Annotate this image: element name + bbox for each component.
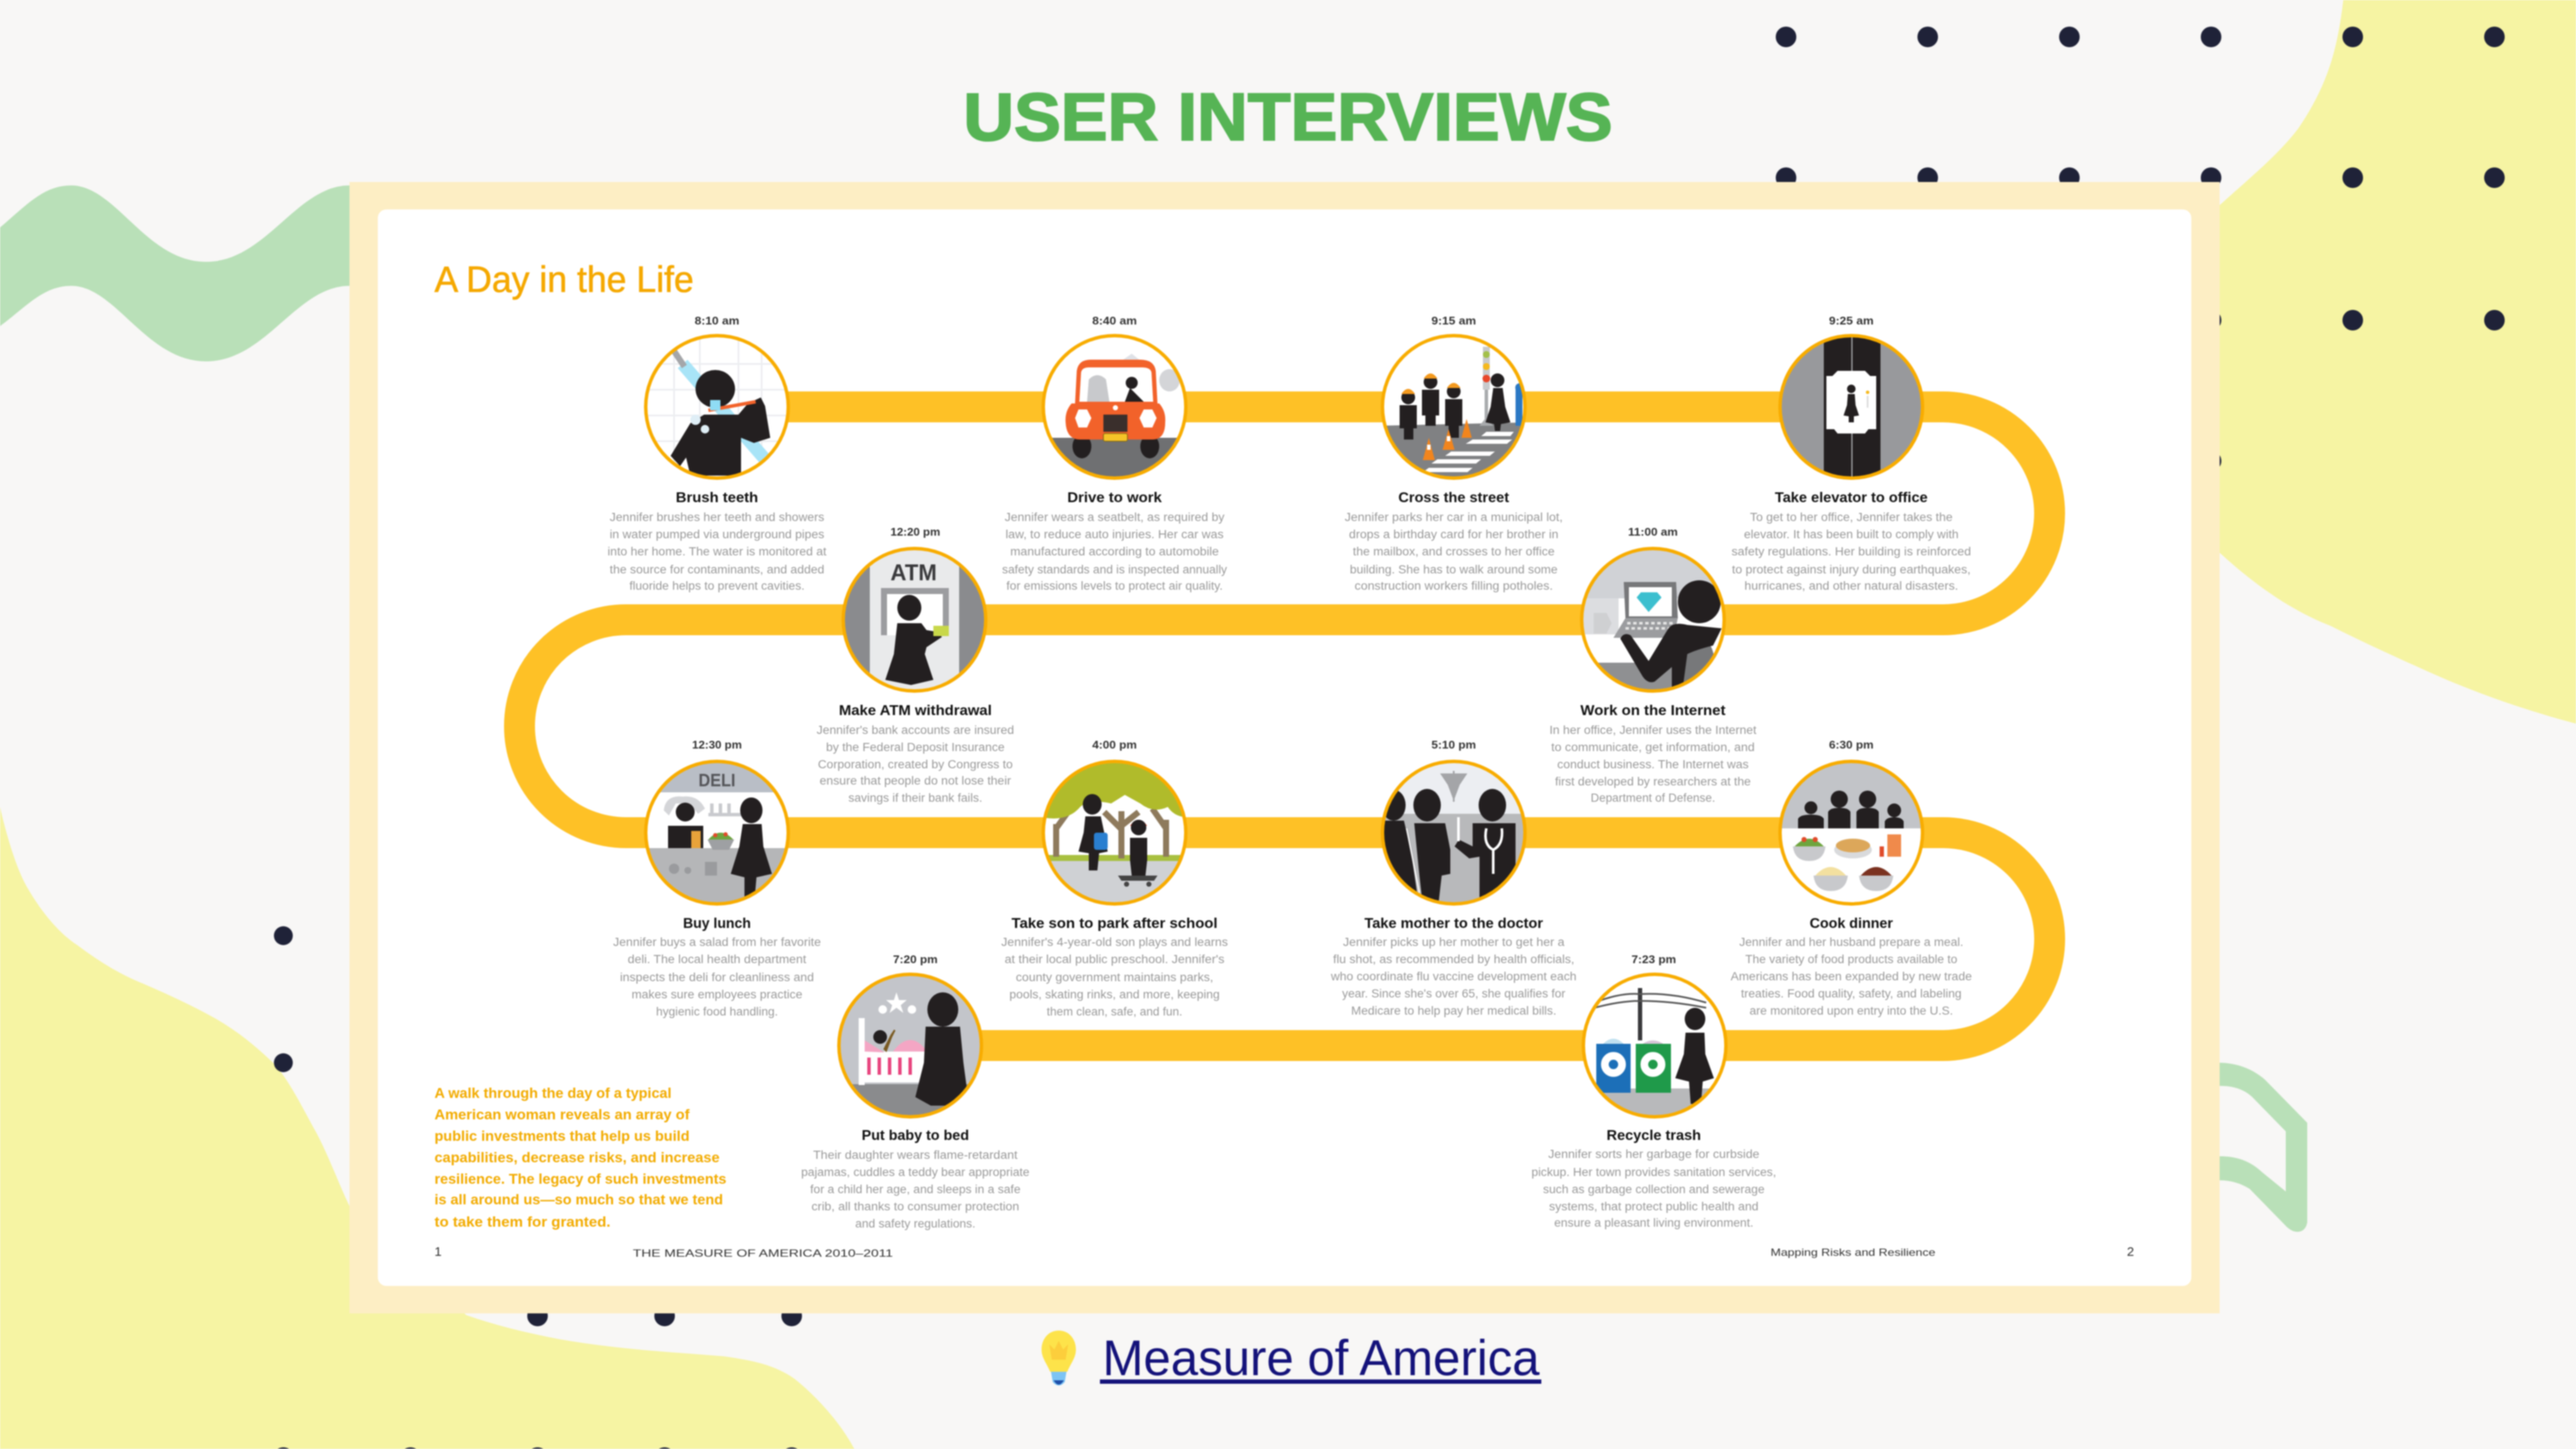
step description: who coordinate flu vaccine development each [1330,970,1577,983]
step description: are monitored upon entry into the U.S. [1750,1004,1953,1017]
icon: car [1042,336,1188,481]
time: 12:30 pm [692,738,742,751]
step description: hurricanes, and other natural disasters. [1745,579,1958,592]
step description: to protect against injury during earthquakes, [1732,563,1971,576]
step description: drops a birthday card for her brother in [1349,528,1558,541]
step description: Their daughter wears flame-retardant [813,1149,1018,1161]
step: Make ATM withdrawal [817,525,1014,804]
step description: such as garbage collection and sewerage [1543,1183,1765,1196]
step description: pickup. Her town provides sanitation services, [1532,1166,1776,1179]
step: Cross the street [1345,314,1563,592]
time: 9:15 am [1431,314,1476,327]
time: 8:40 am [1092,314,1137,327]
panel: white page [378,209,2191,1286]
step description: Jennifer brushes her teeth and showers [610,511,824,524]
step description: construction workers filling potholes. [1355,579,1552,592]
step description [817,724,1014,804]
time: 8:10 am [695,314,739,327]
step description: Jennifer's 4-year-old son plays and learns [1001,936,1228,949]
step description: crib, all thanks to consumer protection [811,1200,1019,1213]
step description: the source for contaminants, and added [610,563,824,576]
callout: intro paragraph: public investments that help us build [434,1128,690,1144]
time: 7:20 pm [893,953,938,966]
step title: Put baby to bed [862,1128,969,1143]
footer: page 1: 1 [434,1245,441,1259]
step description: fluoride helps to prevent cavities. [629,579,805,592]
time: 5:10 pm [1431,738,1476,751]
step title: Work on the Internet [1580,703,1726,718]
step description: Jennifer and her husband prepare a meal. [1740,936,1963,949]
step description: safety regulations. Her building is reinforced [1731,545,1971,558]
step description: first developed by researchers at the [1555,775,1751,788]
background blob: bottom left yellow [0,807,854,1449]
step description: Jennifer's bank accounts are insured [817,724,1014,737]
icon: crossing street [1381,336,1527,480]
icon: doctor [1381,761,1527,908]
step: Cook dinner [1731,738,1971,1017]
panel frame [349,182,2220,1313]
step title: Take elevator to office [1775,490,1928,506]
step description [1731,511,1971,592]
step description: law, to reduce auto injuries. Her car was [1005,528,1224,541]
title: USER INTERVIEWS [963,79,1613,155]
step description: inspects the deli for cleanliness and [620,971,814,984]
time: 9:25 am [1829,314,1874,327]
time: 7:23 pm [1631,953,1676,966]
step description: at their local public preschool. Jennifer's [1005,953,1224,966]
step description: ensure that people do not lose their [819,774,1012,787]
step description: treaties. Food quality, safety, and labeling [1741,987,1961,1000]
step description: makes sure employees practice [632,988,802,1001]
step description [801,1149,1030,1230]
step description: safety standards and is inspected annually [1002,563,1227,576]
step title: Buy lunch [683,916,750,931]
step description: for emissions levels to protect air quality. [1006,579,1223,592]
source link: Measure of America: Measure of America [1103,1331,1540,1386]
step description: Department of Defense. [1590,791,1716,804]
footer: publication name: THE MEASURE OF AMERICA 2010–2011 [633,1247,893,1259]
step description [1345,511,1563,592]
step description [608,511,827,592]
step description: manufactured according to automobile [1010,545,1219,558]
step: Put baby to bed [801,953,1030,1230]
callout: intro paragraph: American woman reveals an array of [434,1106,690,1123]
step description: for a child her age, and sleeps in a safe [811,1183,1020,1196]
step description: conduct business. The Internet was [1558,758,1749,771]
callout: intro paragraph: to take them for granted. [434,1214,611,1230]
step title: Brush teeth [676,490,758,506]
step description [1330,936,1577,1017]
step description: elevator. It has been built to comply with [1744,528,1959,541]
step description: flu shot, as recommended by health officials, [1333,953,1575,966]
background wave: green left [0,185,361,361]
callout: intro paragraph [434,1085,726,1230]
icon: dinner [1778,760,1924,904]
step: Buy lunch [613,738,821,1018]
icon: light bulb [1042,1331,1076,1385]
step description [613,936,821,1018]
footer: page 2: 2 [2127,1245,2134,1259]
step: Recycle trash [1532,953,1776,1229]
step description [1001,936,1228,1018]
step description: in water pumped via underground pipes [610,528,824,541]
step description: Corporation, created by Congress to [817,758,1013,771]
icon: ATM: ATM [890,560,937,585]
step: Take son to park after school [1001,738,1228,1018]
callout: intro paragraph: capabilities, decrease risks, and increase [434,1149,720,1166]
step description: them clean, safe, and fun. [1047,1005,1182,1018]
step description: by the Federal Deposit Insurance [826,741,1005,754]
step description: Jennifer picks up her mother to get her a [1343,936,1565,949]
time: 12:20 pm [890,525,940,538]
step description: Jennifer buys a salad from her favorite [613,936,821,949]
step description: The variety of food products available to [1745,953,1958,966]
step description: savings if their bank fails. [848,791,982,804]
time: 6:30 pm [1829,738,1874,751]
step description: Americans has been expanded by new trade [1731,970,1971,983]
icon: ATM [841,547,987,693]
step description: hygienic food handling. [656,1005,778,1018]
icon: laptop [1580,547,1726,695]
icon: deli [644,760,790,908]
step description: pajamas, cuddles a teddy bear appropriate [801,1166,1030,1179]
step description: pools, skating rinks, and more, keeping [1010,988,1219,1001]
callout: intro paragraph: A walk through the day of a typical [434,1085,671,1101]
step description [1731,936,1971,1017]
step description [1002,511,1227,592]
step title: Take mother to the doctor [1364,916,1544,931]
icon: brushing teeth [646,336,788,478]
background hook: green right [2207,1063,2307,1232]
step: Brush teeth [608,314,827,592]
step description [1549,724,1757,804]
step description: deli. The local health department [628,953,806,966]
icon: park [1042,760,1188,907]
icon: deli: DELI [699,771,735,791]
step description: the mailbox, and crosses to her office [1353,545,1554,558]
step description: to communicate, get information, and [1551,741,1755,754]
icon: crib [837,974,983,1119]
time: 4:00 pm [1092,738,1137,751]
step description: year. Since she's over 65, she qualifies for [1342,987,1566,1000]
step title: Take son to park after school [1012,916,1218,931]
time: 11:00 am [1628,525,1678,538]
step description: Jennifer wears a seatbelt, as required by [1005,511,1224,524]
step description: systems, that protect public health and [1549,1200,1759,1213]
step title: Make ATM withdrawal [839,703,992,718]
background blob: top right yellow [2198,0,2576,724]
step description: Jennifer parks her car in a municipal lot, [1345,511,1563,524]
step title: Drive to work [1067,490,1163,506]
step: Take mother to the doctor [1330,738,1577,1017]
icon: recycling bins [1582,974,1728,1123]
callout: intro paragraph: is all around us—so much so that we tend [434,1191,723,1208]
step description: To get to her office, Jennifer takes the [1750,511,1953,524]
heading: A Day in the Life: A Day in the Life [434,259,694,300]
step title: Recycle trash [1607,1128,1701,1143]
callout: intro paragraph: resilience. The legacy of such investments [434,1171,726,1187]
step description: Jennifer sorts her garbage for curbside [1548,1148,1759,1161]
step title: Cross the street [1398,490,1510,506]
step description [1532,1148,1776,1229]
icon: elevator [1780,334,1923,480]
step description: In her office, Jennifer uses the Internet [1549,724,1757,737]
footer: section name: Mapping Risks and Resilience [1771,1246,1935,1258]
step: Drive to work [1002,314,1227,592]
step description: ensure a pleasant living environment. [1554,1216,1753,1229]
step description: and safety regulations. [855,1217,975,1230]
step: Take elevator to office [1731,314,1971,592]
step title: Cook dinner [1810,916,1893,931]
timeline track [519,407,2050,1046]
step description: into her home. The water is monitored at [608,545,827,558]
step description: Medicare to help pay her medical bills. [1352,1004,1556,1017]
step description: county government maintains parks, [1016,971,1213,984]
step: Work on the Internet [1549,525,1757,804]
step description: building. She has to walk around some [1350,563,1558,576]
